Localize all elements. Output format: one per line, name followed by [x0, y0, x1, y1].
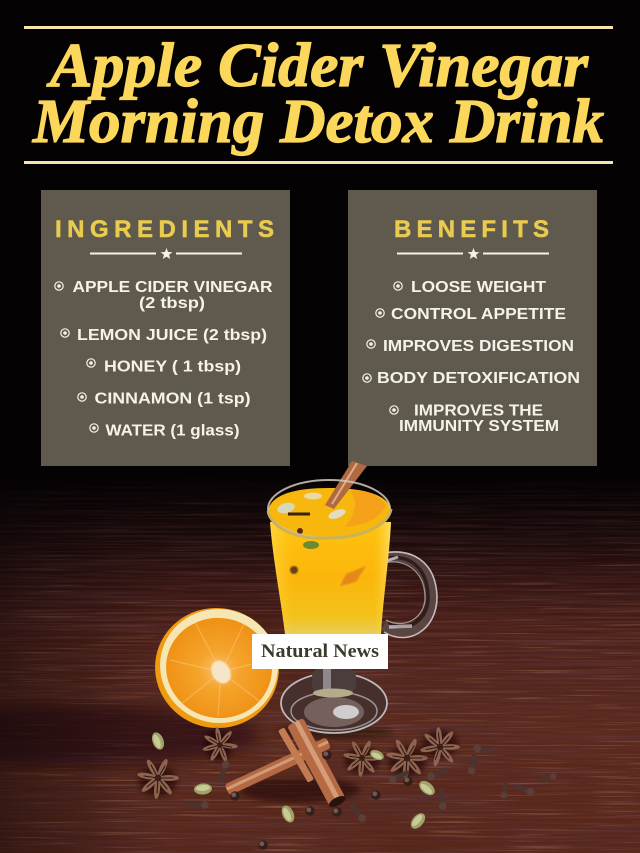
- panel: ingredients: [41, 190, 290, 466]
- drink: glass mug of yellow detox drink: [268, 461, 437, 739]
- list item: loose weight: LOOSE WEIGHT: [411, 279, 547, 296]
- list item: apple cider vinegar: (2 tbsp): [139, 295, 205, 312]
- spices scattered on the table: [137, 722, 557, 850]
- logo: Natural News: [252, 634, 388, 669]
- peppercorns: [230, 750, 413, 850]
- list item: water: WATER (1 glass): [106, 422, 240, 440]
- list item: control appetite: CONTROL APPETITE: [391, 306, 566, 323]
- glass handle: [383, 552, 437, 638]
- floating spices: [276, 492, 347, 549]
- list item: cinnamon: CINNAMON (1 tsp): [94, 390, 250, 408]
- divider with star: [397, 248, 549, 259]
- logo: Natural News: Natural News: [261, 641, 379, 662]
- title block: [24, 26, 613, 164]
- list item: improves the immunity system: IMMUNITY SYSTEM: [399, 418, 559, 435]
- list item: apple cider vinegar: [55, 279, 272, 312]
- cloves: [187, 744, 557, 823]
- list item: honey: HONEY ( 1 tbsp): [104, 358, 241, 376]
- cinnamon stick in glass: [325, 461, 367, 509]
- list item: improves the immunity system: [390, 402, 559, 435]
- list item: body detoxification: BODY DETOXIFICATION: [377, 370, 580, 387]
- title line 2: Morning Detox Drink: [32, 88, 604, 156]
- list item: apple cider vinegar: APPLE CIDER VINEGAR: [72, 279, 272, 296]
- glass rim: [268, 480, 390, 538]
- list item: improves the immunity system: IMPROVES THE: [414, 402, 543, 420]
- list item: improves digestion: IMPROVES DIGESTION: [383, 338, 574, 355]
- star anise cluster: [137, 722, 463, 799]
- list item: lemon juice: LEMON JUICE (2 tbsp): [77, 327, 267, 344]
- orange half: [146, 598, 288, 738]
- divider with star: [90, 248, 242, 259]
- heading: benefits: BENEFITS: [394, 216, 549, 243]
- juice surface: [268, 488, 391, 538]
- glass foot and stem: [281, 668, 387, 733]
- title line 1: Apple Cider Vinegar: [46, 32, 589, 100]
- cardamom pods: [150, 731, 437, 831]
- cinnamon sticks: [224, 718, 360, 809]
- heading: ingredients: INGREDIENTS: [55, 216, 274, 243]
- panel: benefits: [348, 190, 597, 466]
- glass body filled with juice: [270, 522, 391, 634]
